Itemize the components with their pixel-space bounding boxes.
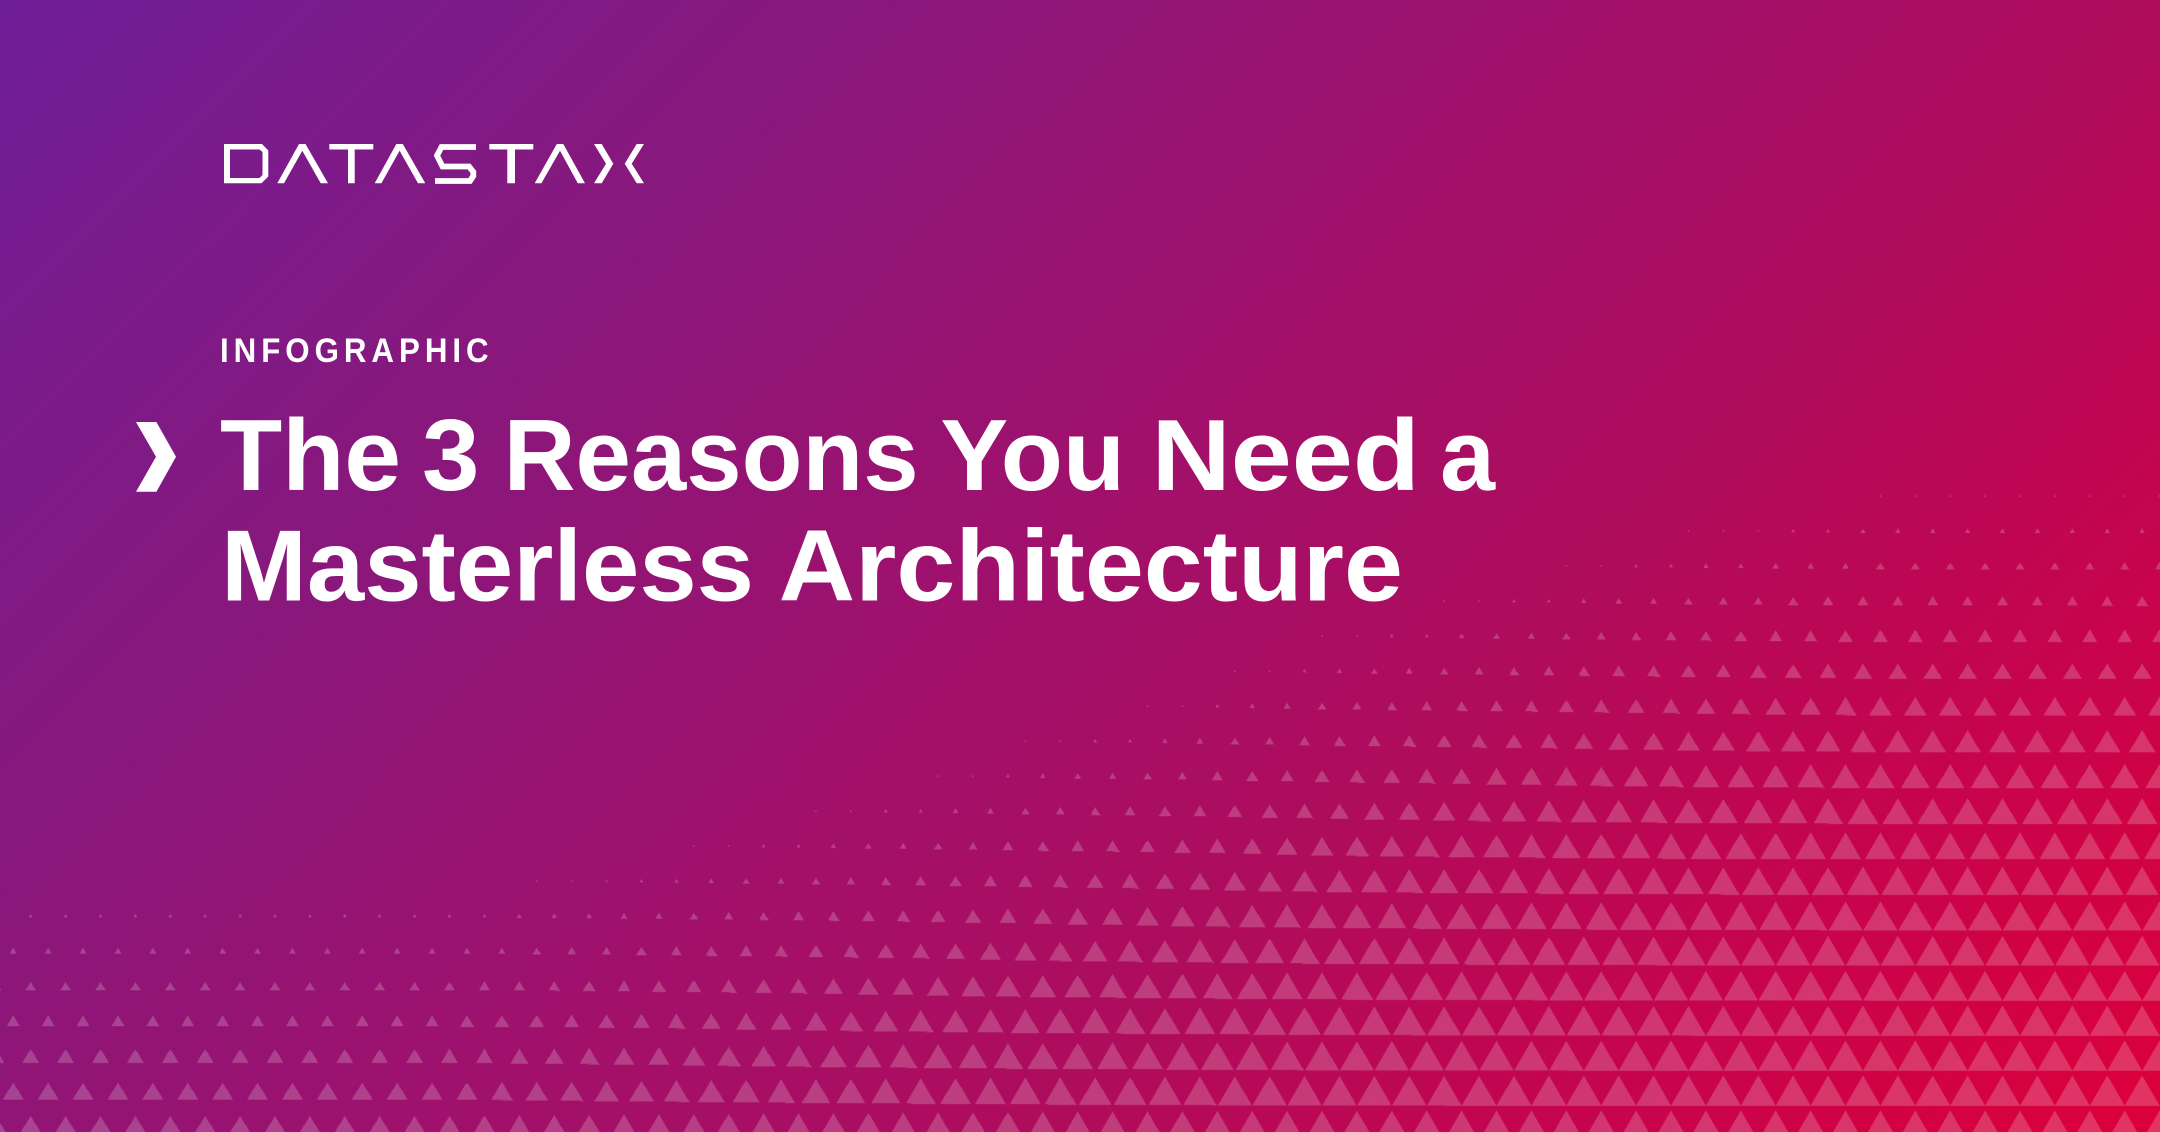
- title: [220, 400, 1496, 622]
- title: 3: [422, 400, 479, 512]
- triangle halftone pattern: [0, 490, 2160, 1132]
- title: Architecture: [779, 510, 1403, 622]
- title: a: [1440, 400, 1496, 512]
- title: You: [940, 400, 1125, 512]
- logo: DataStax wordmark: [224, 144, 644, 183]
- title: Need: [1152, 400, 1420, 512]
- title: Masterless: [221, 510, 754, 622]
- eyebrow: INFOGRAPHIC: INFOGRAPHIC: [220, 331, 489, 369]
- title: Reasons: [504, 400, 919, 512]
- title: The: [220, 400, 401, 512]
- icon: chevron: [136, 422, 176, 492]
